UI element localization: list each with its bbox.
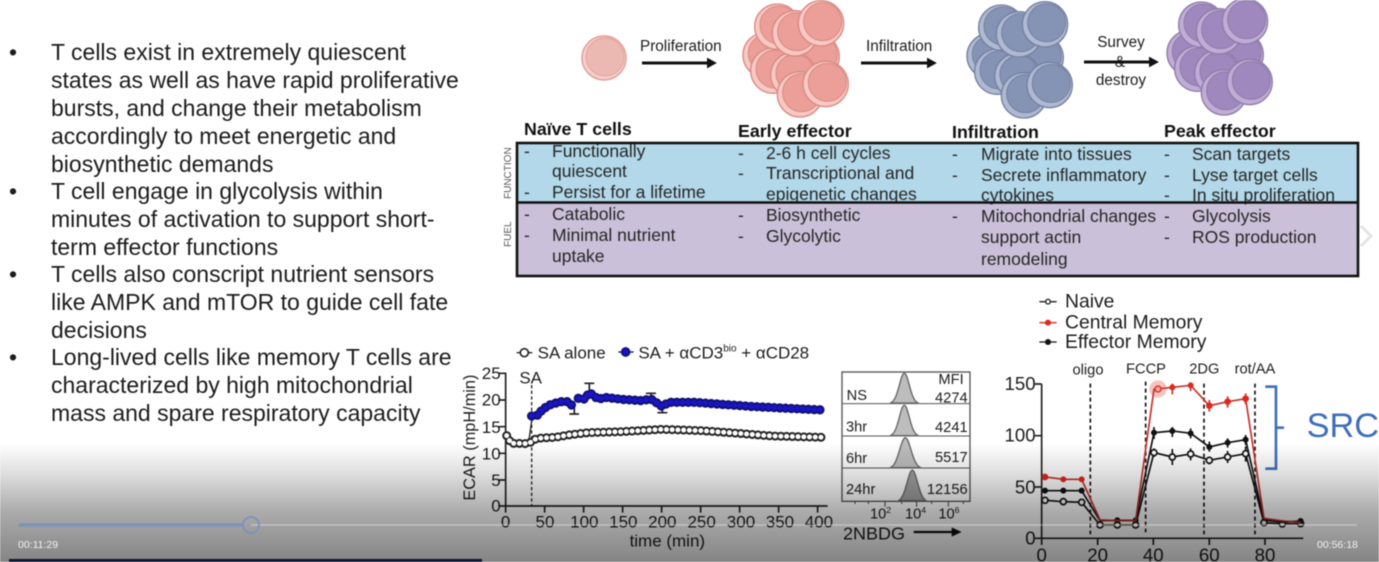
column: peak effector: - (1164, 227, 1170, 247)
flow histogram: 2NBDG uptake: 3hr (846, 419, 867, 435)
bullet list: T cell engage in glycolysis within (51, 178, 383, 204)
column: naive T cells: quiescent (552, 161, 627, 181)
bullet list: characterized by high mitochondrial (51, 372, 413, 398)
column: infiltration: Secrete inflammatory (981, 165, 1147, 185)
bullet list: • (9, 178, 17, 204)
line chart: ECAR over time: 20 (482, 391, 501, 410)
legend: OCR series (1039, 292, 1207, 353)
bullet list: states as well as have rapid proliferative (51, 67, 459, 93)
column: infiltration: - (952, 165, 958, 185)
column: early effector: - (738, 226, 744, 246)
column: infiltration: remodeling (981, 249, 1068, 269)
legend: OCR series: Effector Memory (1065, 332, 1207, 353)
bullet list: mass and spare respiratory capacity (51, 400, 421, 426)
flow histogram: 2NBDG uptake: 24hr (846, 482, 875, 498)
series: central memory (1042, 380, 1301, 522)
legend: ECAR series: SA alone (538, 343, 606, 362)
arrow: infiltration: Infiltration (866, 38, 932, 55)
column: early effector: - (738, 143, 744, 163)
arrow: survey and destroy: Survey (1097, 34, 1145, 51)
column: naive T cells: - (524, 141, 530, 161)
series: SA plus antibodies (529, 383, 823, 440)
column: infiltration: Mitochondrial changes (981, 206, 1156, 226)
line chart: OCR: oligo (1073, 362, 1103, 378)
icon: next chevron (1361, 226, 1371, 246)
bracket: SRC: SRC (1307, 407, 1379, 445)
bullet list: T cells exist in extremely quiescent (51, 39, 407, 65)
line chart: ECAR over time: time (min) (630, 532, 705, 551)
arrow: proliferation: Proliferation (640, 38, 722, 55)
column: peak effector: Peak effector (1164, 121, 1276, 141)
arrow: survey and destroy: destroy (1096, 72, 1146, 89)
column: early effector: Early effector (738, 121, 852, 141)
bullet list: Long-lived cells like memory T cells are (51, 344, 452, 370)
column: infiltration: - (952, 206, 958, 226)
bullet list: accordingly to meet energetic and (51, 123, 396, 149)
flow histogram: 2NBDG uptake: 4 (921, 505, 926, 515)
line chart: OCR: FCCP (1126, 361, 1166, 377)
line chart: ECAR over time: SA (519, 368, 543, 387)
flow histogram: 2NBDG uptake: 4241 (935, 420, 968, 436)
column: naive T cells: Minimal nutrient (552, 225, 676, 245)
arrow: proliferation (640, 38, 722, 63)
column: naive T cells: - (524, 204, 530, 224)
legend: ECAR series: + αCD28 (737, 343, 809, 362)
line chart: ECAR over time: 200 (648, 512, 676, 531)
column: naive T cells (524, 119, 706, 266)
side label: fuel: FUEL (503, 221, 514, 247)
flow histogram: 2NBDG uptake: MFI (938, 372, 964, 388)
video progress bar (19, 517, 1357, 533)
line chart: ECAR over time: 0 (501, 512, 510, 531)
column: peak effector: In situ proliferation (1192, 185, 1335, 205)
bullet list: • (9, 344, 17, 370)
column: peak effector: ROS production (1192, 227, 1317, 247)
line chart: ECAR over time: 0 (491, 497, 501, 516)
legend: ECAR series (517, 343, 809, 362)
column: early effector: Biosynthetic (766, 205, 861, 225)
line chart: OCR: 0 (1025, 527, 1036, 548)
column: naive T cells: Functionally (552, 141, 646, 161)
bullet list: • (9, 261, 17, 287)
flow histogram: 2NBDG uptake: 10 (870, 506, 886, 522)
column: peak effector: - (1164, 206, 1170, 226)
icon: infiltration cluster (967, 2, 1072, 118)
line chart: ECAR over time: 350 (766, 512, 794, 531)
column: early effector: 2-6 h cell cycles (766, 143, 891, 163)
column: peak effector: Scan targets (1192, 144, 1290, 164)
line chart: ECAR over time (461, 343, 833, 551)
line chart: OCR (1005, 292, 1379, 562)
column: infiltration: - (952, 144, 958, 164)
bullet list: • (9, 39, 17, 65)
column: peak effector: Lyse target cells (1192, 165, 1318, 185)
video buffered bar (9, 559, 482, 562)
flow histogram: 2NBDG uptake: 6hr (846, 451, 867, 467)
line chart: ECAR over time: ECAR (mpH/min) (461, 375, 479, 501)
column: early effector: epigenetic changes (766, 184, 917, 204)
line chart: ECAR over time: 400 (805, 512, 833, 531)
table: stage function and fuel (503, 119, 1358, 276)
series: effector memory (1042, 427, 1304, 524)
elapsed time: 00:11:29 (18, 539, 58, 551)
bullet list: decisions (51, 317, 147, 343)
column: infiltration: cytokines (981, 185, 1054, 205)
legend: OCR series: Central Memory (1065, 312, 1203, 333)
bullet list: minutes of activation to support short- (51, 206, 435, 232)
column: peak effector (1164, 121, 1335, 247)
bullet list (9, 39, 459, 426)
column: early effector: Glycolytic (766, 226, 841, 246)
line chart: ECAR over time: 250 (687, 512, 716, 531)
line chart: OCR: rot/AA (1235, 362, 1276, 378)
line chart: OCR: 100 (1005, 425, 1036, 446)
column: early effector (738, 121, 917, 246)
line chart: OCR: 2DG (1189, 362, 1219, 378)
icon: peak effector cluster (1167, 0, 1272, 115)
column: infiltration: Migrate into tissues (981, 144, 1132, 164)
bullet list: biosynthetic demands (51, 151, 273, 177)
column: naive T cells: Catabolic (552, 204, 625, 224)
bracket: SRC (1265, 387, 1379, 469)
bullet list: like AMPK and mTOR to guide cell fate (51, 289, 448, 315)
column: early effector: - (738, 205, 744, 225)
column: infiltration: support actin (981, 227, 1081, 247)
line chart: OCR: 50 (1015, 476, 1036, 497)
column: infiltration (952, 122, 1156, 269)
column: peak effector: Glycolysis (1192, 206, 1271, 226)
legend: ECAR series: bio (723, 344, 737, 355)
bullet list: T cells also conscript nutrient sensors (51, 261, 434, 287)
column: naive T cells: Naïve T cells (524, 119, 632, 139)
flow histogram: 2NBDG uptake: 2NBDG (843, 523, 905, 543)
line chart: ECAR over time: 100 (570, 512, 598, 531)
flow histogram: 2NBDG uptake: 12156 (927, 482, 968, 498)
flow histogram: 2NBDG uptake: 5517 (935, 450, 968, 466)
bullet list: term effector functions (51, 234, 278, 260)
column: early effector: - (738, 163, 744, 183)
series: naive (1042, 446, 1304, 528)
line chart: ECAR over time: 5 (491, 471, 501, 490)
side label: function: FUNCTION (503, 147, 514, 199)
legend: ECAR series: SA + αCD3 (638, 343, 723, 362)
column: peak effector: - (1164, 144, 1170, 164)
arrow: survey and destroy (1084, 34, 1149, 89)
column: naive T cells: - (524, 182, 530, 202)
flow histogram: 2NBDG uptake (842, 372, 970, 543)
column: peak effector: - (1164, 165, 1170, 185)
video fade overlay (0, 443, 1379, 562)
line chart: ECAR over time: 300 (727, 512, 755, 531)
bullet list: bursts, and change their metabolism (51, 95, 422, 121)
legend: OCR series: Naive (1065, 292, 1114, 313)
flow histogram: 2NBDG uptake: 6 (955, 505, 960, 515)
line chart: OCR: 150 (1005, 373, 1036, 394)
icon: naive T cell (582, 36, 626, 80)
flow histogram: 2NBDG uptake: NS (847, 388, 867, 404)
line chart: ECAR over time: 10 (482, 444, 501, 463)
column: infiltration: Infiltration (952, 122, 1039, 142)
line chart: ECAR over time: 150 (609, 512, 637, 531)
column: peak effector: - (1164, 185, 1170, 205)
column: naive T cells: - (524, 225, 530, 245)
flow histogram: 2NBDG uptake: 2 (886, 505, 891, 515)
arrow: survey and destroy: & (1115, 54, 1125, 71)
column: naive T cells: uptake (552, 246, 605, 266)
arrow: infiltration (861, 38, 932, 63)
histogram rows (890, 373, 926, 501)
line chart: ECAR over time: 15 (482, 418, 501, 437)
line chart: ECAR over time: 50 (536, 512, 554, 531)
line chart: ECAR over time: 25 (482, 364, 501, 383)
flow histogram: 2NBDG uptake: 10 (905, 506, 921, 522)
series: SA alone (507, 429, 823, 444)
column: early effector: Transcriptional and (766, 163, 914, 183)
column: naive T cells: Persist for a lifetime (552, 182, 706, 202)
total time: 00:56:18 (1317, 539, 1358, 551)
icon: early effector cluster (743, 1, 848, 117)
flow histogram: 2NBDG uptake: 4274 (935, 390, 968, 406)
flow histogram: 2NBDG uptake: 10 (938, 506, 955, 522)
